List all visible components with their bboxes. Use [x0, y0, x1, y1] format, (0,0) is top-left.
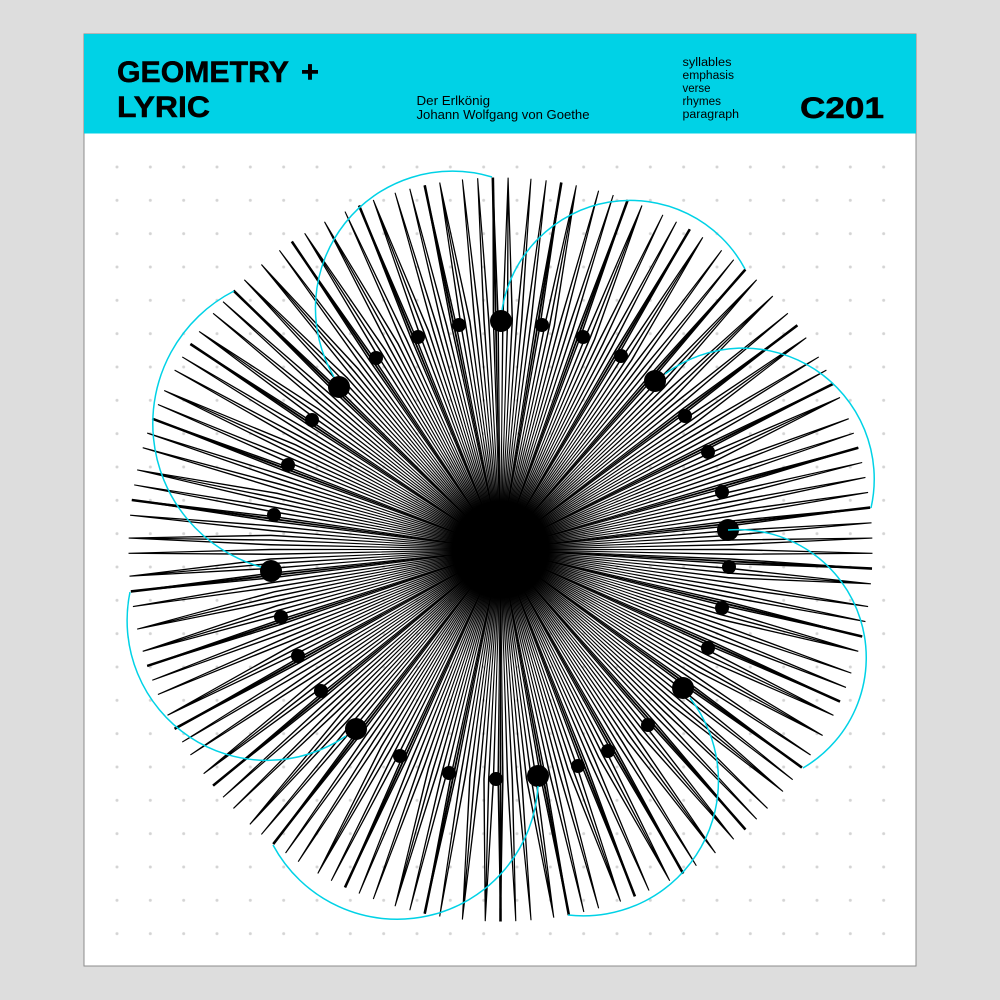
cyan rhyme arcs — [127, 171, 874, 919]
legend list: emphasis — [682, 70, 734, 82]
legend list — [682, 57, 739, 121]
legend list: syllables — [682, 57, 732, 69]
poem and author — [416, 94, 590, 122]
stanza dots — [260, 310, 739, 787]
line dots — [267, 318, 736, 786]
legend list: rhymes — [682, 96, 721, 108]
header band — [84, 34, 916, 134]
dot grid background — [100, 150, 900, 950]
verse line dots — [260, 310, 739, 787]
title: GEOMETRY — [117, 56, 289, 89]
title: LYRIC — [117, 91, 210, 124]
title — [117, 56, 319, 124]
poster card — [84, 34, 916, 966]
radial spokes chart — [122, 174, 876, 926]
legend list: verse — [682, 83, 710, 95]
code label: C201 — [800, 92, 884, 125]
legend list: paragraph — [682, 109, 739, 121]
poem and author: Johann Wolfgang von Goethe — [416, 108, 590, 122]
title: + — [301, 56, 319, 89]
poem and author: Der Erlkönig — [416, 94, 490, 108]
